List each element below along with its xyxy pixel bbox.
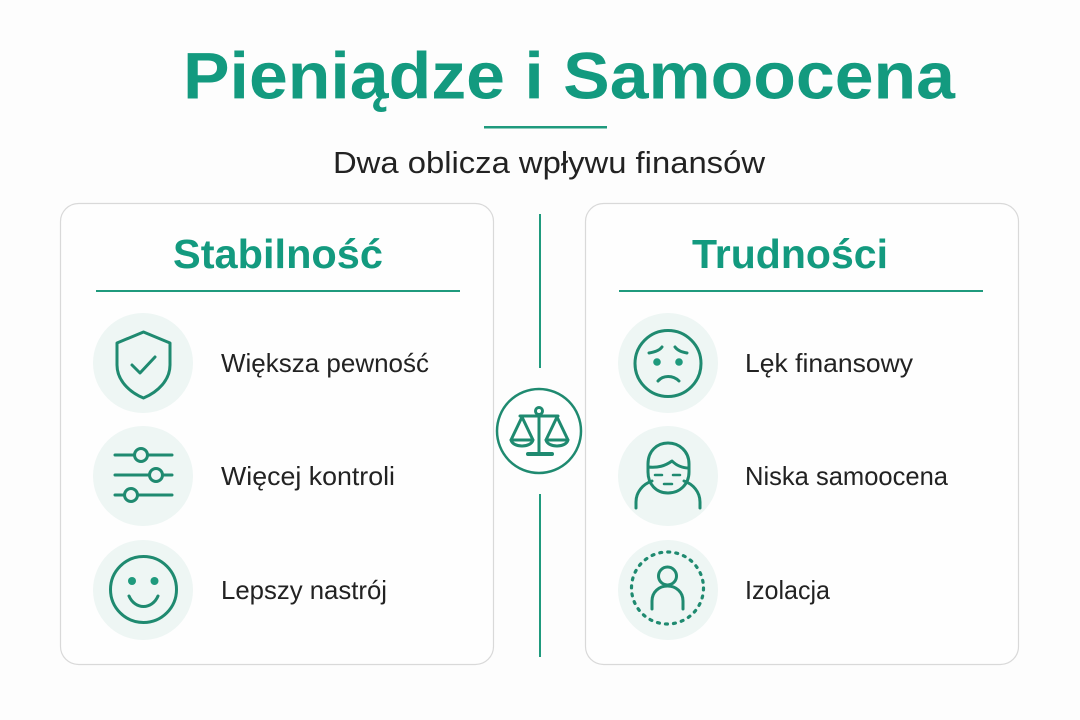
- icon: sliders: [93, 426, 193, 526]
- label: Więcej kontroli: Więcej kontroli: [221, 461, 395, 491]
- center divider top: [539, 214, 541, 368]
- title underline: [484, 126, 607, 128]
- center divider bottom: [539, 494, 541, 657]
- heading rule: [96, 290, 460, 292]
- label: Izolacja: Izolacja: [745, 575, 831, 605]
- icon: shield with check: [93, 313, 193, 413]
- icon: worried face: [618, 313, 718, 413]
- label: Lęk finansowy: Lęk finansowy: [745, 348, 913, 378]
- icon: smiling face: [93, 540, 193, 640]
- icon: balance scale: [497, 389, 581, 473]
- label: Lepszy nastrój: Lepszy nastrój: [221, 575, 387, 605]
- icon: isolated person: [618, 540, 718, 640]
- subtitle: Dwa oblicza wpływu finansów: [333, 145, 766, 180]
- icon: sad person: [618, 426, 718, 526]
- label: Niska samoocena: Niska samoocena: [745, 461, 949, 491]
- panel: Trudności: [586, 204, 1018, 664]
- heading: Trudności: Trudności: [692, 231, 888, 277]
- panel: Stabilność: [60, 204, 494, 664]
- heading: Stabilność: Stabilność: [173, 231, 383, 277]
- heading rule: [619, 290, 983, 292]
- label: Większa pewność: Większa pewność: [221, 348, 429, 378]
- title: Pieniądze i Samoocena: [183, 38, 956, 112]
